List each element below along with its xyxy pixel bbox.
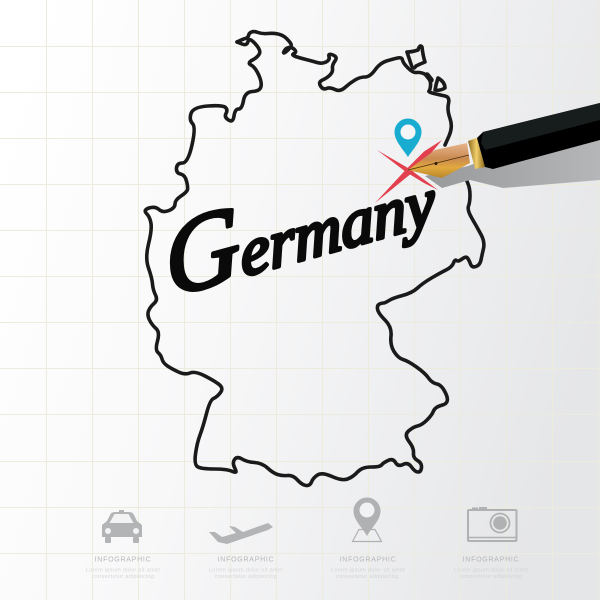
fountain pen [408,103,600,178]
icon: camera [468,507,516,541]
pen nib [408,143,470,178]
pen barrel [477,103,600,169]
pen shadow [425,118,600,188]
caption: taxi [86,556,160,580]
caption: airplane: Lorem ipsum dolor sit amet [209,568,283,574]
map outline: Germany [145,32,484,486]
caption: taxi: INFOGRAPHIC [95,556,151,564]
caption: map pin: Lorem ipsum dolor sit amet [331,568,405,574]
caption: camera: INFOGRAPHIC [463,556,519,564]
caption: camera [454,556,528,580]
caption: taxi: Lorem ipsum dolor sit amet [86,568,160,574]
caption: map pin: INFOGRAPHIC [340,556,396,564]
icon row [102,498,516,544]
captions [86,556,528,580]
caption: camera: consectetur adipisicing [460,574,522,580]
pen gold ring [468,138,485,169]
caption: airplane [209,556,283,580]
caption: taxi: consectetur adipisicing [92,574,154,580]
icon: airplane [209,523,273,544]
caption: airplane: consectetur adipisicing [215,574,277,580]
caption: map pin [331,556,405,580]
caption: camera: Lorem ipsum dolor sit amet [454,568,528,574]
icon: red cross mark [375,140,442,203]
icon: blue location pin [394,118,422,157]
icon: map pin [352,498,382,542]
caption: airplane: INFOGRAPHIC [218,556,274,564]
icon: taxi [102,510,142,543]
caption: map pin: consectetur adipisicing. [336,574,400,580]
heading: Germany: Germany [160,129,439,321]
